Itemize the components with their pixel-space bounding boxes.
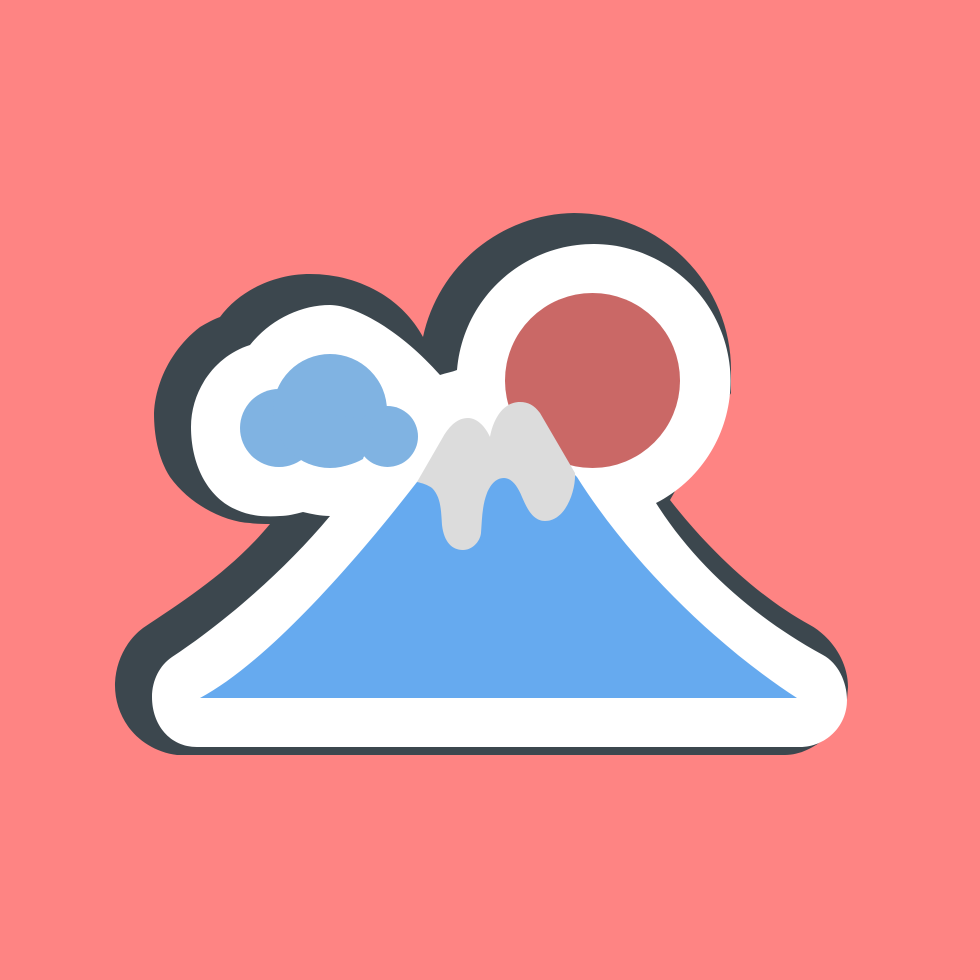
- icon: cloud: [240, 354, 418, 468]
- sticker white border: [152, 244, 847, 747]
- icon: sun: [505, 293, 680, 468]
- icon: mountain snow cap: [417, 402, 575, 550]
- icon: mountain body: [200, 440, 797, 698]
- sticker shadow: [115, 213, 848, 755]
